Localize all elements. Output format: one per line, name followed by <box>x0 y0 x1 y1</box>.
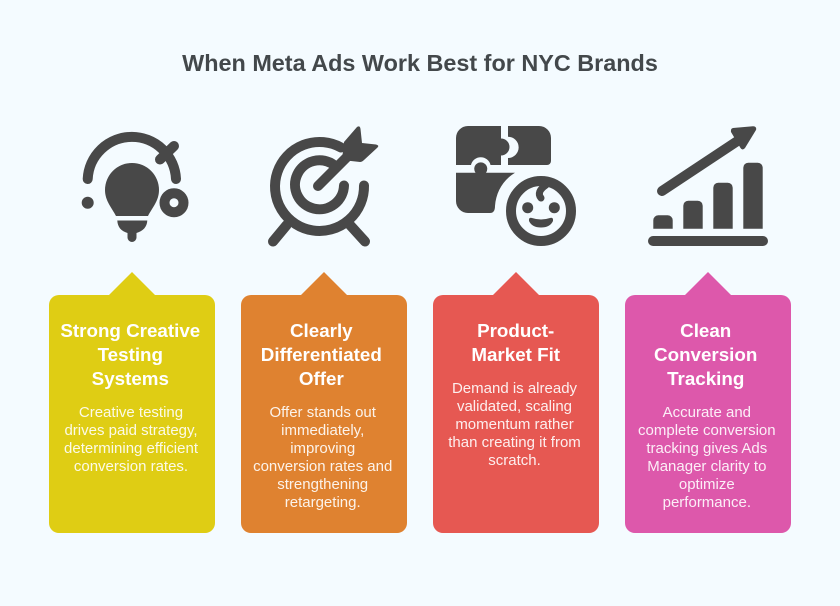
body text: Accurate and <box>663 404 751 421</box>
body text: scratch. <box>488 452 541 469</box>
icon: growth bar chart with arrow <box>648 126 768 246</box>
heading: Clearly <box>290 320 353 341</box>
heading: Market Fit <box>471 344 560 365</box>
panel: clean conversion tracking <box>625 272 791 533</box>
body text: improving <box>290 440 355 457</box>
body text: tracking gives Ads <box>646 440 767 457</box>
body text: strengthening <box>277 476 368 493</box>
panel: product-market fit <box>433 272 599 533</box>
body text: Demand is already <box>452 380 577 397</box>
body text: drives paid strategy, <box>64 422 198 439</box>
heading: Tracking <box>667 368 744 389</box>
body text: validated, scaling <box>457 398 572 415</box>
body text <box>448 380 581 469</box>
body text: retargeting. <box>285 494 361 511</box>
heading: Strong Creative <box>60 320 200 341</box>
panel: strong creative testing systems <box>49 272 215 533</box>
body text: performance. <box>663 494 751 511</box>
body text: conversion rates and <box>253 458 392 475</box>
heading: Systems <box>92 368 169 389</box>
heading: Offer <box>299 368 344 389</box>
icon: puzzle with baby face <box>456 126 571 241</box>
body text: Creative testing <box>79 404 183 421</box>
heading: Testing <box>98 344 163 365</box>
panel: clearly differentiated offer <box>241 272 407 533</box>
heading: Differentiated <box>261 344 382 365</box>
heading: Clean <box>680 320 731 341</box>
title: When Meta Ads Work Best for NYC Brands <box>182 50 658 76</box>
heading <box>261 320 382 389</box>
body text: complete conversion <box>638 422 776 439</box>
body text: momentum rather <box>455 416 574 433</box>
icons row <box>82 126 768 246</box>
heading <box>60 320 200 389</box>
icon: light bulb with orbit <box>82 137 184 242</box>
body text: immediately, <box>281 422 364 439</box>
heading <box>471 320 560 365</box>
body text <box>253 404 392 511</box>
body text: Manager clarity to <box>647 458 766 475</box>
heading <box>654 320 757 389</box>
body text: optimize <box>679 476 735 493</box>
body text: than creating it from <box>448 434 581 451</box>
body text <box>638 404 776 511</box>
heading: Conversion <box>654 344 757 365</box>
heading: Product- <box>477 320 554 341</box>
body text: determining efficient <box>64 440 198 457</box>
body text: conversion rates. <box>74 458 188 475</box>
body text: Offer stands out <box>269 404 376 421</box>
icon: target with arrow <box>273 126 378 242</box>
body text <box>64 404 198 475</box>
